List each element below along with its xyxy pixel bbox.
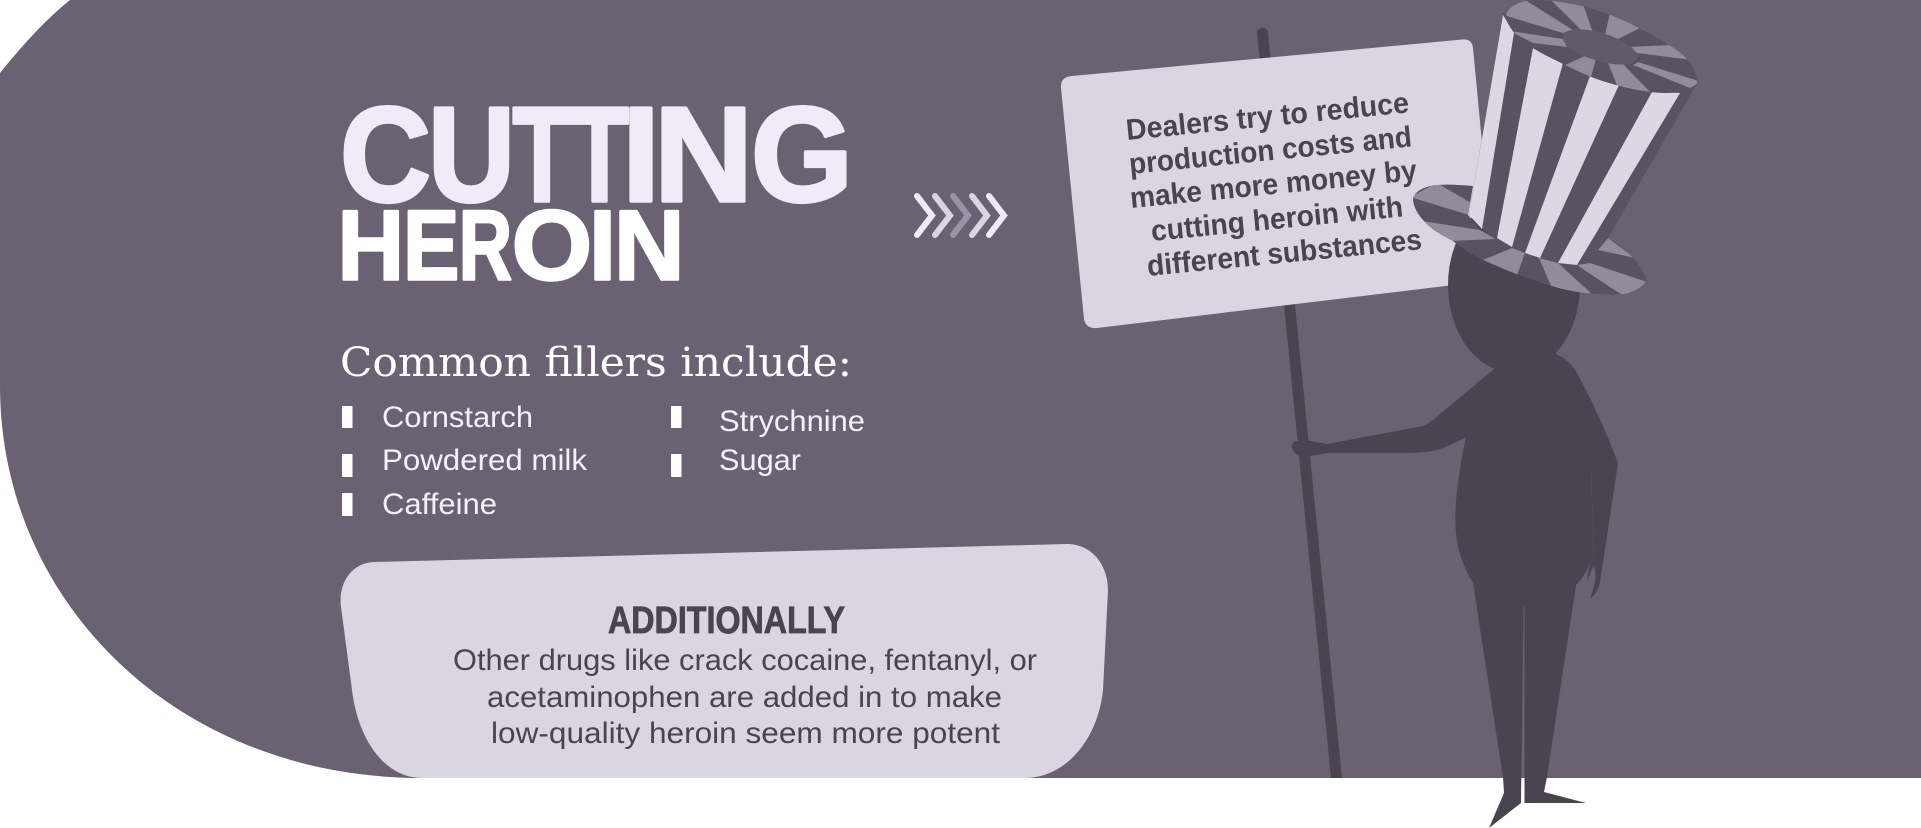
sign text: production costs and bbox=[1127, 120, 1413, 181]
heading: common fillers: Common fillers include: bbox=[340, 340, 852, 386]
figure arm gap line bbox=[1591, 470, 1594, 558]
title line: cutting: U bbox=[428, 79, 515, 230]
icon: striped top hat bbox=[1410, 0, 1702, 297]
panel body text: Other drugs like crack cocaine, fentanyl, or bbox=[453, 644, 1037, 677]
sign board bbox=[1061, 39, 1495, 328]
sign text bbox=[1124, 86, 1423, 283]
title line: cutting: I bbox=[622, 79, 660, 230]
filler list bbox=[342, 401, 865, 521]
sign text: cutting heroin with bbox=[1149, 190, 1404, 248]
icon: chevron arrows bbox=[917, 196, 1004, 235]
title line: heroin: H bbox=[338, 190, 404, 300]
sign text: Dealers try to reduce bbox=[1124, 86, 1410, 147]
title line: cutting: N bbox=[654, 79, 753, 230]
sign text: make more money by bbox=[1128, 154, 1419, 215]
title line: cutting: T bbox=[512, 79, 572, 230]
figure: person silhouette bbox=[1292, 197, 1618, 828]
title line: cutting: G bbox=[751, 79, 853, 230]
list item: powdered milk: Powdered milk bbox=[382, 444, 588, 477]
figure head bbox=[1448, 197, 1580, 373]
hat top bbox=[1500, 0, 1702, 96]
list item: cornstarch: Cornstarch bbox=[382, 401, 533, 434]
title line: heroin: R bbox=[459, 190, 512, 300]
list item: strychnine: Strychnine bbox=[719, 405, 865, 438]
hat crown stripes bbox=[1469, 13, 1698, 265]
panel body text bbox=[453, 644, 1037, 750]
list item: caffeine: Caffeine bbox=[382, 488, 497, 521]
title line: heroin: O bbox=[512, 190, 592, 300]
title line: heroin: E bbox=[403, 190, 459, 300]
panel body text: low-quality heroin seem more potent bbox=[491, 717, 1001, 750]
bullet markers bbox=[342, 406, 682, 516]
figure body bbox=[1292, 340, 1618, 828]
hat brim bbox=[1410, 183, 1650, 297]
sign text: different substances bbox=[1145, 223, 1423, 283]
panel heading: ADDITIONALLY bbox=[608, 600, 845, 642]
list item: sugar: Sugar bbox=[719, 444, 801, 477]
sign pole bbox=[1257, 28, 1342, 778]
title line: cutting: T bbox=[570, 79, 629, 230]
panel: additionally bbox=[341, 544, 1108, 778]
title line: cutting: C bbox=[340, 79, 431, 230]
title line: heroin: I bbox=[589, 190, 616, 300]
panel body text: acetaminophen are added in to make bbox=[487, 681, 1002, 714]
title line: heroin: N bbox=[614, 190, 684, 300]
title bbox=[338, 79, 853, 300]
